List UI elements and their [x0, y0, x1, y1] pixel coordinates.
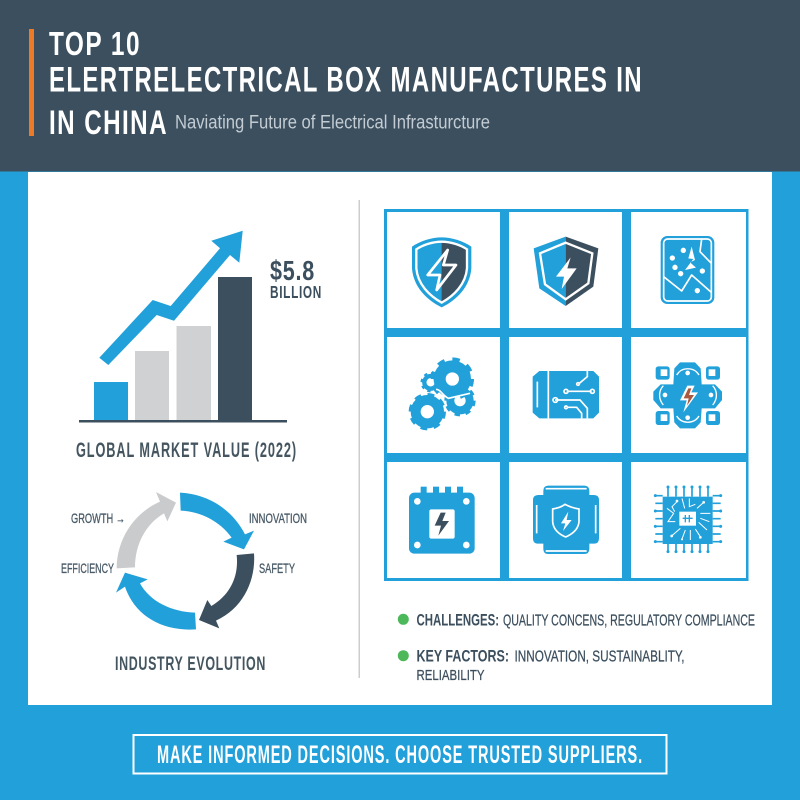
icon: angular shield with bolt [534, 237, 598, 306]
key factors text: RELIABILITY [416, 667, 484, 684]
cycle labels: INNOVATION [249, 511, 307, 526]
challenges and key factors list [398, 612, 755, 684]
challenges text [416, 612, 755, 630]
cycle labels: EFFICIENCY [61, 561, 114, 576]
cycle diagram: industry evolution [61, 492, 307, 675]
cycle labels [61, 511, 307, 576]
icon: cracked panel [661, 236, 714, 304]
bars [94, 277, 252, 420]
market value figure: BILLION [270, 282, 322, 302]
cycle arrows [116, 492, 254, 630]
title [49, 25, 643, 142]
main white panel [28, 172, 772, 705]
bullet: challenges [398, 614, 409, 625]
icon: gears [411, 360, 474, 428]
title: IN CHINA [49, 104, 168, 142]
icon: round shield with bolt [412, 237, 471, 307]
challenges text: CHALLENGES: [416, 612, 499, 630]
icon: circuit box [533, 371, 599, 418]
growth arrow [99, 231, 243, 365]
cycle labels: GROWTH → [71, 511, 125, 526]
icon: microprocessor [654, 485, 722, 553]
subtitle: Naviating Future of Electrical Infrasturcture [175, 112, 490, 134]
icon grid [384, 209, 748, 581]
call to action box [134, 735, 666, 774]
cycle caption: INDUSTRY EVOLUTION [115, 654, 266, 675]
icon: power module [653, 362, 722, 428]
chart baseline [79, 420, 287, 422]
title: TOP 10 [49, 25, 141, 62]
chart caption: GLOBAL MARKET VALUE (2022) [76, 439, 297, 462]
accent bar [29, 29, 34, 136]
key factors text: KEY FACTORS: [416, 648, 509, 666]
column divider [358, 200, 360, 678]
key factors text [416, 648, 684, 684]
bullet: key factors [398, 650, 409, 661]
bar chart: global market value [76, 231, 322, 462]
icon: shield chip [533, 486, 599, 554]
key factors text: INNOVATION, SUSTAINABLITY, [514, 648, 684, 666]
icon: chip with bolt [409, 487, 475, 554]
cycle labels: SAFETY [259, 561, 295, 576]
market value figure [270, 255, 322, 302]
market value figure: $5.8 [270, 255, 315, 286]
header banner [0, 0, 800, 172]
